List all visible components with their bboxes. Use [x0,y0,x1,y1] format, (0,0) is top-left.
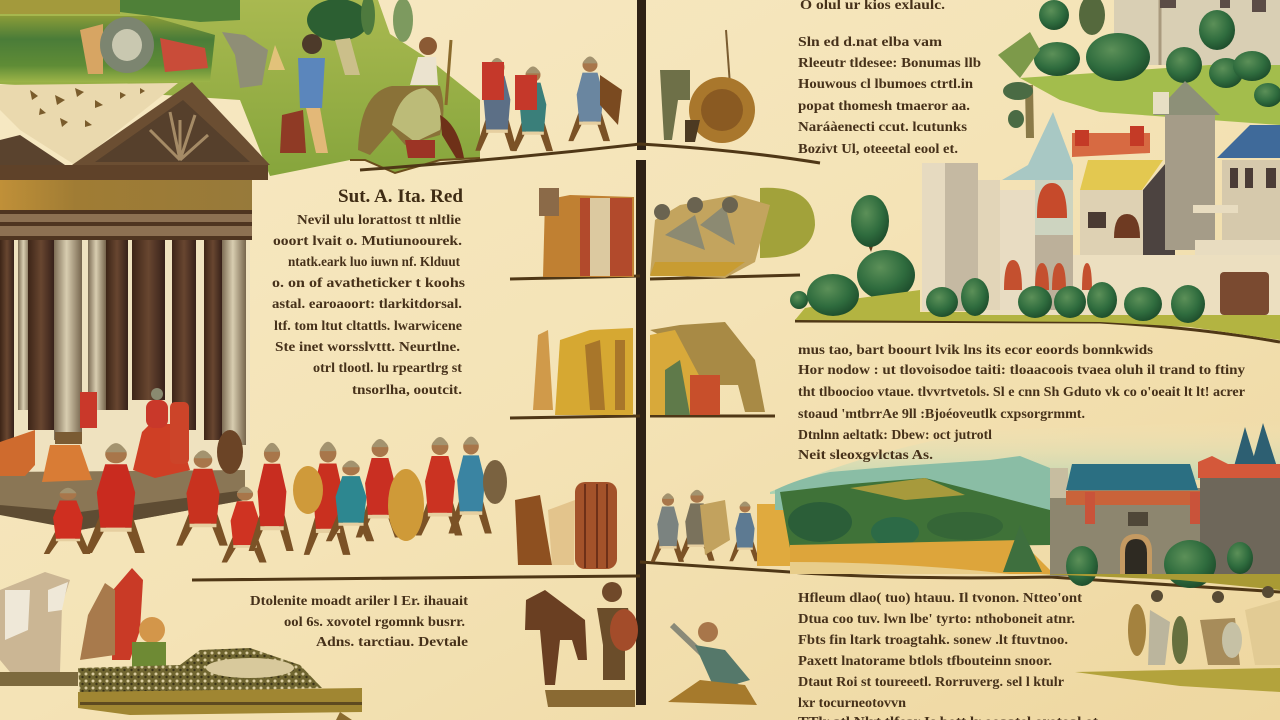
rider 1 [1128,590,1188,665]
rider 3 [1245,586,1280,665]
gabled house [1080,190,1145,255]
text block: centre right: Hor nodow : ut tlovoisodoe taiti: tloaacoois tvaea oluh il trand to ftiny [798,362,1245,377]
grey castle [1050,488,1280,576]
central vertical line [636,0,646,705]
upper castle tower [1114,0,1280,65]
temple entablature [0,165,268,180]
orange arched doors [1004,260,1092,290]
centre row 2 left: orange block [539,188,634,277]
seated red figures [133,388,190,478]
orange sphere [139,617,165,643]
text block: bottom right: lxr tocurneotovvn [798,695,907,710]
text block: centre left: ooort lvait o. Mutiunoourek. [273,233,462,248]
orange roof [1072,133,1150,157]
orange battlements [1198,456,1280,478]
text block: centre left: o. on of avatheticker t koohs [272,275,465,290]
text block: top right [798,34,981,156]
mountains [775,456,1060,510]
right house [1222,160,1280,252]
small pine [1003,525,1042,572]
lower bushes [790,274,1205,323]
text block: top right: Naráàenecti ccut. lcutunks [798,119,967,134]
centre row 3 right: elephant [650,322,765,415]
text block: centre right: stoaud 'mtbrrAe 9ll :Bjoéoveutlk cxpsorgrmmt. [798,406,1085,421]
centre top icon: soldier with round shield [660,30,755,143]
bottom left scene [0,568,362,720]
ochre field [790,540,1050,574]
white robed figures [0,572,70,672]
gold shield 2 [388,469,424,541]
banners [1085,492,1200,524]
text block: centre right: mus tao, bart boourt lvik lns its ecor eoords bonnkwids [798,342,1153,357]
text block: centre left: otrl tlootl. lu rpeartlrg st [313,360,463,375]
column bases [0,430,35,476]
procession of figures [44,388,507,563]
top left landscape panel [0,0,480,176]
text block: centre right: Dtnlnn aeltatk: Dbew: oct jutrotl [798,427,992,442]
text block: top right: Rleeutr tldesee: Bonumas llb [798,55,981,70]
spires [1233,423,1278,470]
soldier 3 [176,450,228,546]
text block: top right: Houwous cl lbumoes ctrtl.in [798,76,974,91]
text block: lower left caption: ool 6s. xovotel rgomnk busrr. [284,614,465,629]
riders ground [1075,668,1280,692]
white keep [922,163,964,311]
gold shield 1 [293,466,323,514]
text block: centre left: astal. earoaoort: tlarkitdorsal. [272,296,462,311]
centre bottom icon: horse and soldier [525,582,638,707]
round shield [483,460,507,504]
centre row 4 left: barrels [515,482,617,569]
figure: stone statue [222,32,285,88]
icon: stone mound [80,17,208,74]
castle bushes [1066,540,1253,588]
soldier 2 [85,443,145,553]
centre row 3 left: yellow block [533,328,633,415]
forest hills [780,478,1050,548]
text block: centre left: ltf. tom ltut cltattls. lwarwicene [274,318,462,333]
text block: top right: Bozivt Ul, oteeetal eool et. [798,141,958,156]
text block: bottom right: Dtaut Roi st toureeetl. Rorruverg. sel l ktulr [798,674,1064,689]
centre top figures: three people [475,56,622,151]
castle walls [980,255,1280,315]
temple steps [0,470,245,530]
text block: lower left caption: Dtolenite moadt ariler l Er. ihauait [250,593,469,608]
lower left trees [866,240,875,252]
text block: lower left caption [250,593,469,649]
text block: centre left [272,212,465,397]
figure: rider with spear and beast [358,37,464,158]
text block: centre right: Neit sleoxgvlctas As. [798,447,933,462]
yellow roof [1080,160,1163,190]
figure: blue tunic man [280,34,328,153]
centre row 4 right: seated people [651,490,790,566]
soldier 1 [44,488,90,554]
teal roof [1066,464,1198,490]
round tower [1165,115,1215,250]
pale blue cone [1002,112,1073,180]
temple roof [0,83,178,165]
orange band [1066,491,1200,505]
sky wash [770,420,1280,494]
centre bottom icon: kneeling figure [668,622,757,705]
meadow strip [795,290,1280,340]
text block: bottom right: Hfleum dlao( tuo) htauu. Il tvonon. Ntteo'ont [798,590,1083,605]
text block: bottom right: Fbts fin ltark troagtahk. sonew .lt ftuvtnoo. [798,632,1068,647]
soldier 6 [304,442,350,555]
upper bushes [1034,0,1280,107]
text block: centre right [798,342,1245,462]
text block: bottom right: Dtua coo tuv. lwn lbe' tyrto: nthoboneit atnr. [798,611,1075,626]
bottom right riders [1075,586,1280,692]
soldier 8 [416,437,462,535]
temple pediment [72,82,270,165]
dark gable [1143,157,1175,255]
small topiary tree [1025,85,1034,138]
icon: green tree [307,0,413,75]
text block: centre left: Ste inet worsslvttt. Neurtlne. [275,339,460,354]
top right landscape and castle [790,0,1280,340]
window [1128,512,1148,526]
red robed figure [112,568,143,660]
temple columns [0,240,250,480]
heading: centre left text: Sut. A. Ita. Red [338,186,463,207]
platform [78,688,362,715]
olive tree [998,32,1040,78]
text block: centre left: tnsorlha, ooutcit. [352,382,462,397]
text block: bottom right [798,590,1099,720]
temple [0,82,270,530]
soldier in blue [448,437,492,534]
blue roof [1217,125,1280,158]
ledge [0,672,78,686]
text block: bottom right: Paxett lnatorame btlols tfbouteinn snoor. [798,653,1052,668]
text block: centre left: Nevil ulu lorattost tt nltlie [297,212,461,227]
soldier 4 [222,487,267,563]
ground lines [192,144,1280,592]
kneeling brown figure [80,583,115,660]
text block: centre right: tht tlboocioo vtaue. tlvvrtvetols. Sl e cnn Sh Gduto vk co o'oeait lt lt! acrer [798,384,1245,399]
grass strip [1040,574,1280,590]
centre row 2 right: riders with green egg [650,188,815,278]
soldier 7 [356,439,402,537]
gate arch [1120,534,1152,577]
teal soldier [326,461,374,541]
lattice fence [1220,272,1269,315]
ornate heap [78,648,322,695]
lower right landscape and castle [770,420,1280,590]
upper green hill [1020,60,1280,125]
text block: top right: popat thomesh tmaeror aa. [798,98,970,113]
soldier 5 [249,443,294,551]
text block: lower left caption: Adns. tarctiau. Devtale [316,634,468,649]
rider 2 [1200,591,1242,665]
red arched door [1037,183,1067,218]
green shrub [132,642,166,670]
brown shield [217,430,243,474]
text block: top right: Sln ed d.nat elba vam [798,34,943,49]
text block: centre left: ntatk.eark luo iuwn nf. Klduut [288,254,460,269]
centre tower [1000,190,1035,310]
